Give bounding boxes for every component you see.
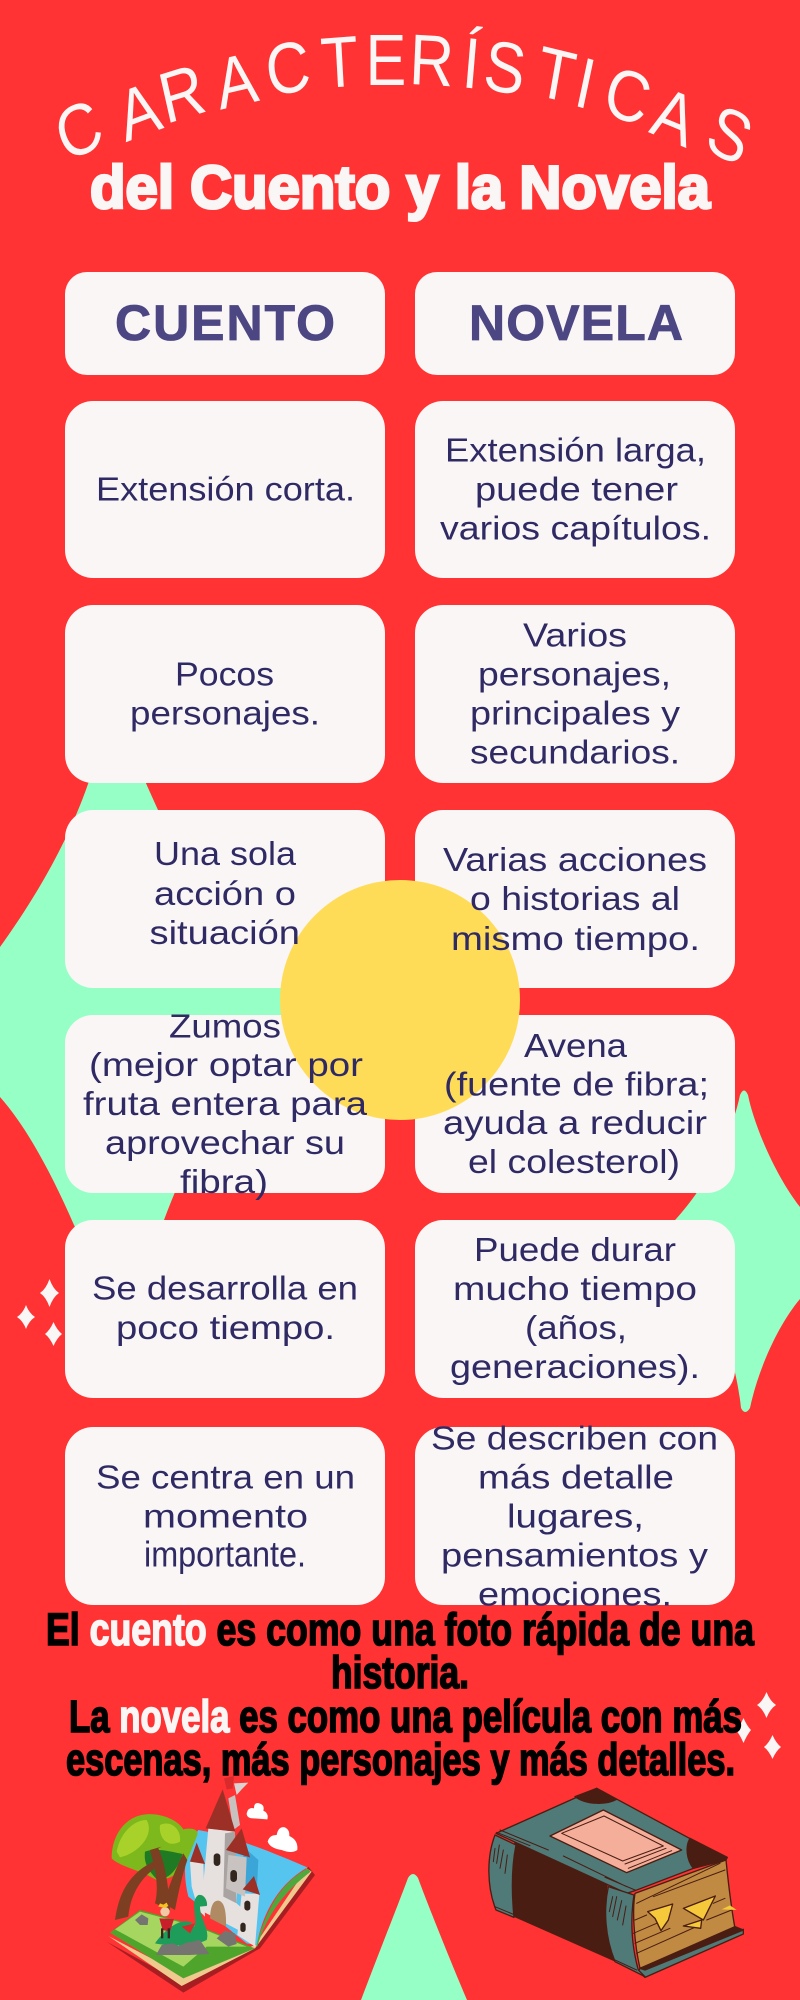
card: row 5 novela: [415, 1220, 735, 1398]
text: row 3 cuento: situación: [150, 914, 300, 951]
icon: storybook with castle: [107, 1776, 315, 1993]
card: row 4 novela: [415, 1015, 735, 1193]
text: row 5 novela: [450, 1231, 700, 1385]
text: row 5 cuento: [92, 1270, 358, 1346]
text: row 1 novela: Extensión larga,: [445, 432, 706, 468]
text: row 1 novela: [440, 432, 711, 546]
text: row 6 novela: más detalle: [478, 1458, 674, 1496]
text: row 5 novela: mucho tiempo: [453, 1270, 697, 1307]
card: row 3 cuento: [65, 810, 385, 988]
card: row 3 novela: [415, 810, 735, 988]
card: row 6 novela: [415, 1427, 735, 1605]
text: row 6 novela: pensamientos y: [441, 1536, 709, 1574]
text: row 3 cuento: acción o: [154, 875, 296, 912]
text: row 3 novela: mismo tiempo.: [451, 920, 700, 957]
text: row 3 novela: Varias acciones: [443, 841, 707, 878]
text: row 4 cuento: fruta entera para: [83, 1085, 368, 1122]
text: row 2 novela: Varios: [523, 616, 627, 654]
title: CARACTERÍSTICAS on an arc: CARACTERÍSTICAS: [46, 20, 762, 182]
text: row 6 cuento: momento: [143, 1498, 308, 1534]
text: row 3 novela: [443, 841, 707, 957]
text: row 6 novela: lugares,: [507, 1498, 644, 1534]
card: header novela: [415, 272, 735, 375]
card: row 2 novela: [415, 605, 735, 783]
text: row 4 novela: ayuda a reducir: [443, 1104, 707, 1141]
text: row 4 cuento: [83, 1008, 368, 1200]
text: row 5 novela: Puede durar: [474, 1231, 676, 1268]
text: row 1 novela: puede tener: [475, 470, 678, 508]
panels: comparison cards: [65, 272, 735, 1605]
card: row 6 cuento: [65, 1427, 385, 1605]
text: row 3 cuento: Una sola: [154, 835, 297, 872]
text: row 3 novela: o historias al: [470, 880, 680, 917]
text: row 2 novela: [470, 616, 681, 770]
heading: NOVELA: NOVELA: [469, 295, 683, 351]
decorative star: right mint: [640, 1090, 800, 1412]
card: row 2 cuento: [65, 605, 385, 783]
text: row 4 novela: Avena: [524, 1027, 628, 1064]
card: row 4 cuento: [65, 1015, 385, 1193]
text: row 1 novela: varios capítulos.: [440, 510, 711, 546]
text: row 4 novela: el colesterol): [468, 1143, 680, 1180]
text: row 5 novela: (años,: [525, 1309, 627, 1346]
text: row 2 novela: principales y: [470, 694, 681, 732]
text: row 2 cuento: Pocos: [175, 656, 274, 692]
text: row 5 cuento: Se desarrolla en: [92, 1270, 358, 1307]
text: row 4 cuento: (mejor optar por: [89, 1046, 363, 1083]
text: row 6 cuento: [96, 1458, 355, 1574]
text: row 2 cuento: [130, 656, 320, 732]
text: row 6 cuento: Se centra en un: [96, 1458, 355, 1496]
text: row 3 cuento: [150, 835, 300, 951]
card: header cuento: [65, 272, 385, 375]
text: row 4 cuento: Zumos: [169, 1008, 281, 1044]
text: row 1 cuento: Extensión corta.: [96, 470, 355, 508]
decorative star: left mint: [0, 700, 345, 1300]
sparkles: right: [736, 1692, 781, 1759]
text: row 2 novela: personajes,: [478, 656, 671, 692]
text: row 6 novela: [431, 1420, 718, 1612]
text: row 6 novela: Se describen con: [431, 1420, 718, 1456]
yellow circle: [280, 880, 520, 1120]
card: row 1 cuento: [65, 401, 385, 578]
text: row 5 cuento: poco tiempo.: [116, 1309, 335, 1346]
sparkles: left: [17, 1279, 62, 1346]
text: row 4 novela: [443, 1027, 709, 1180]
conclusion text block: [46, 1604, 755, 1785]
text: row 2 cuento: personajes.: [130, 694, 320, 732]
icon: big closed book: [489, 1788, 743, 1977]
text: row 5 novela: generaciones).: [450, 1348, 700, 1385]
heading: CUENTO: CUENTO: [115, 295, 335, 351]
text: row 6 novela: emociones.: [478, 1576, 672, 1612]
text: row 6 cuento: importante.: [144, 1534, 306, 1574]
text: row 4 cuento: aprovechar su: [105, 1124, 345, 1161]
text: row 4 cuento: fibra): [180, 1163, 268, 1200]
subtitle: del Cuento y la Novela: [90, 154, 711, 221]
card: row 5 cuento: [65, 1220, 385, 1398]
conclusion text block: historia.: [331, 1647, 469, 1698]
text: row 4 novela: (fuente de fibra;: [444, 1066, 709, 1102]
card: row 1 novela: [415, 401, 735, 578]
text: row 2 novela: secundarios.: [470, 734, 680, 770]
decorative star: bottom mint: [361, 1874, 467, 2000]
